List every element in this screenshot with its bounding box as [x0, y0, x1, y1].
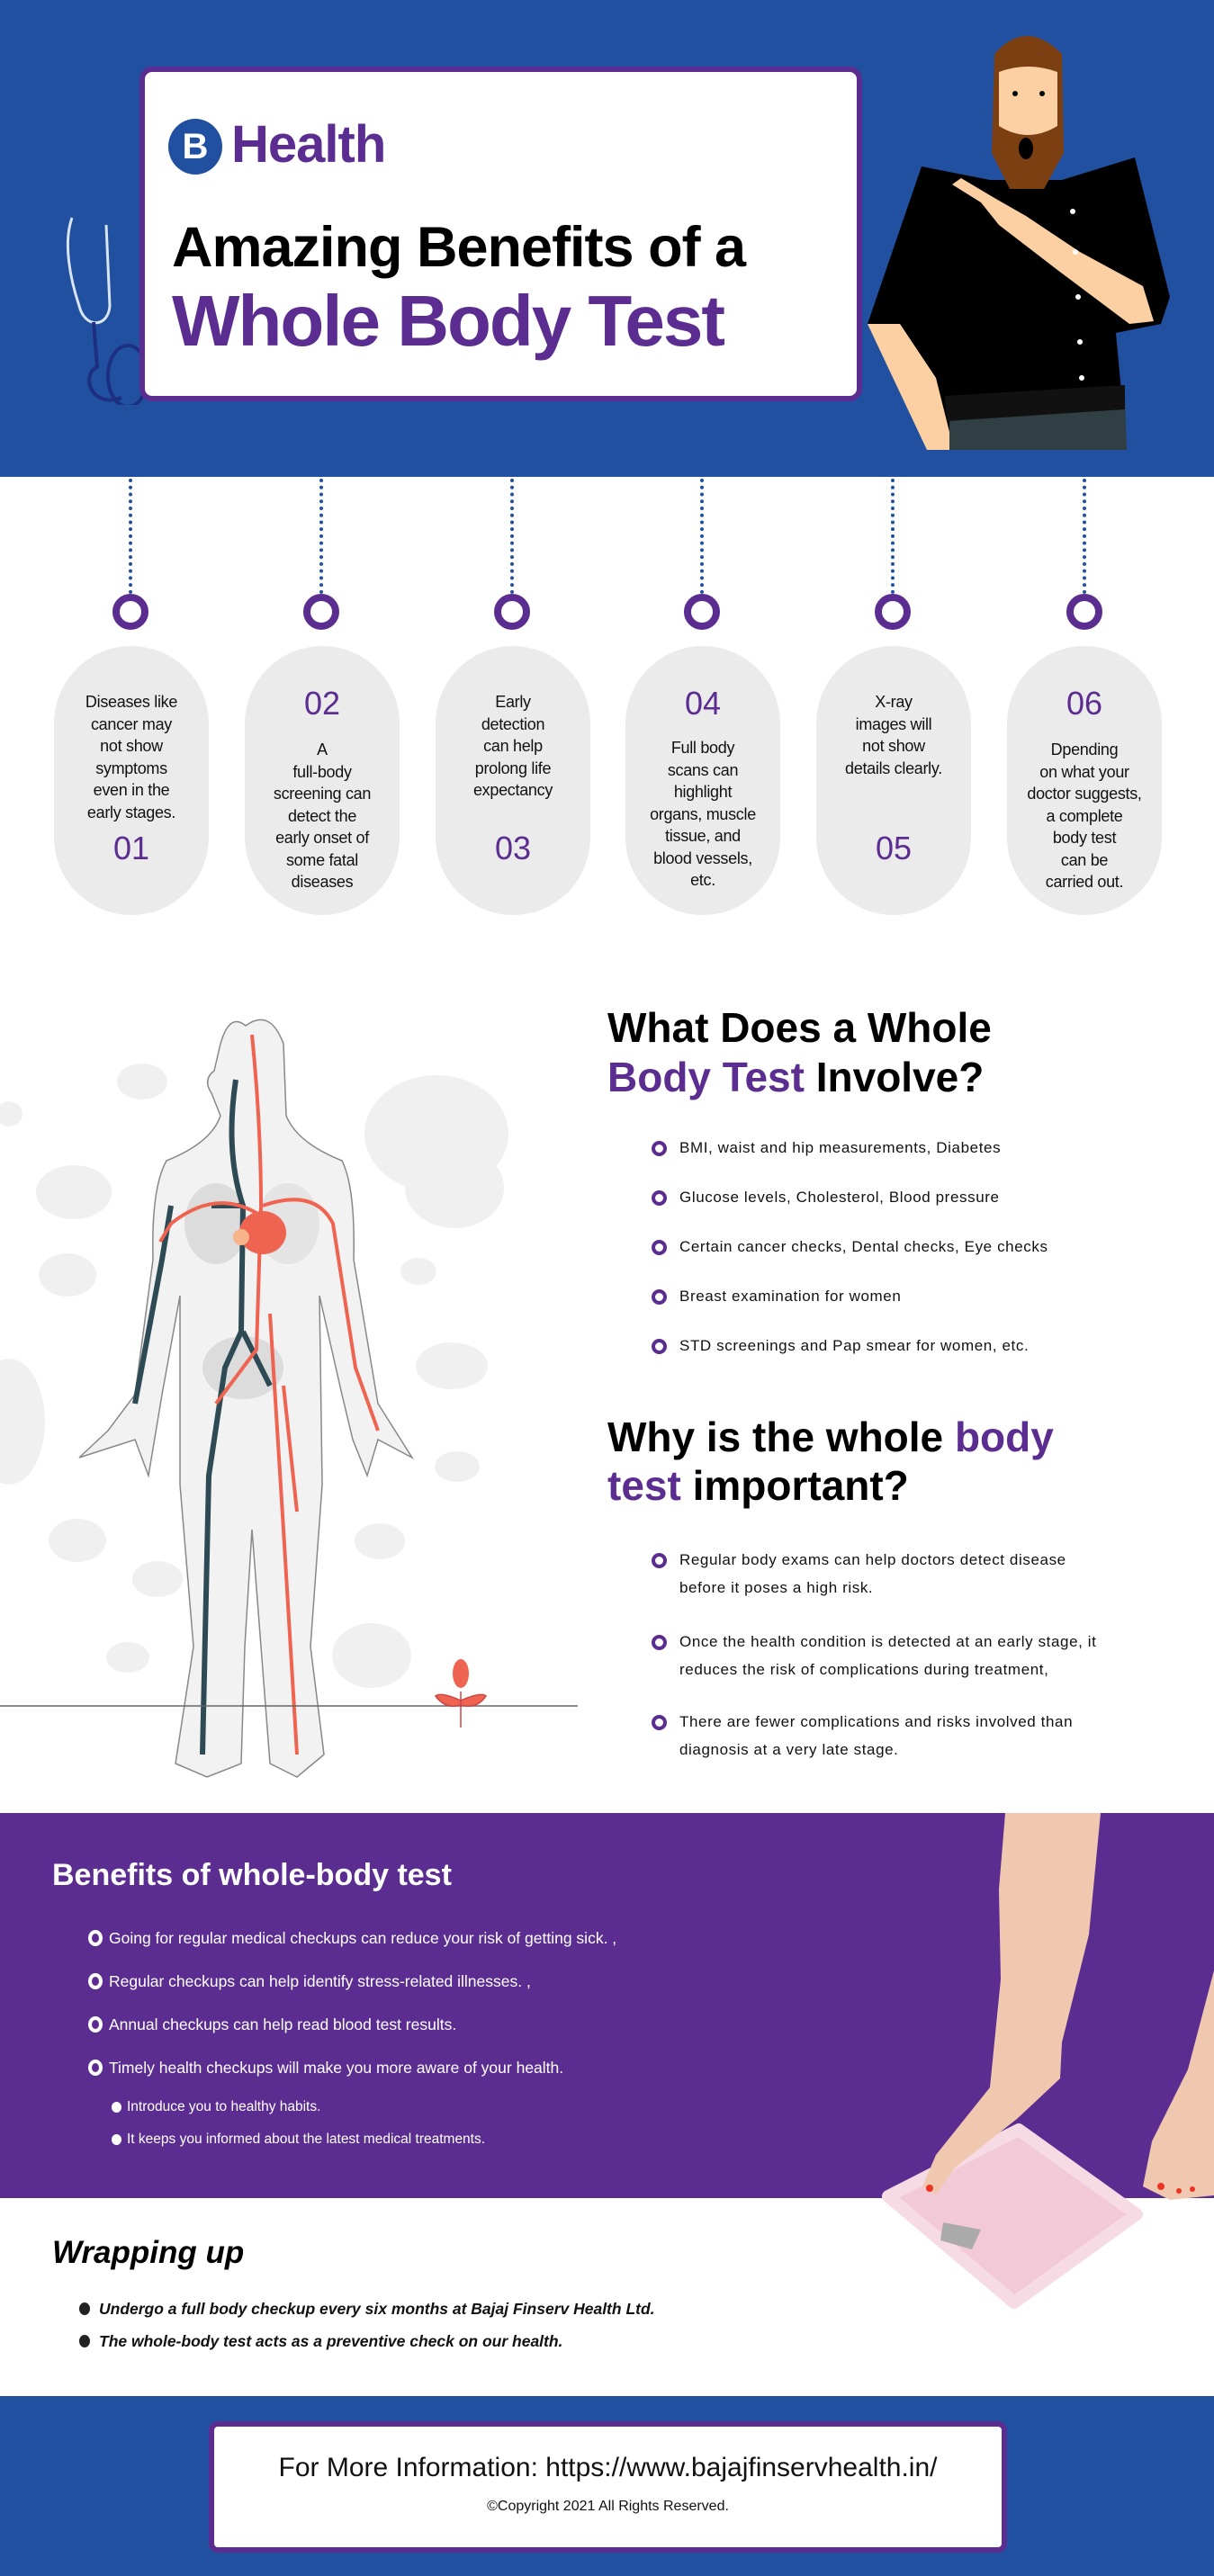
pill 05: details clearly. [845, 759, 942, 777]
list: why important: reduces the risk of complications during treatment, [679, 1661, 1048, 1678]
pill 01: early stages. [87, 803, 175, 821]
pill 06: on what your [1039, 763, 1129, 781]
pill 05 [816, 646, 971, 915]
illustration: human circulatory system [0, 1019, 578, 1778]
list: why important: Regular body exams can help doctors detect disease [679, 1551, 1066, 1568]
pill 03: Early [495, 693, 531, 711]
logo: B Health [168, 115, 385, 175]
footer: blue band [0, 2396, 1214, 2576]
list: what the test involves: Breast examination for women [679, 1288, 901, 1305]
pill 06: a complete [1046, 806, 1123, 824]
panel: benefits of whole-body test (purple) [0, 1813, 1214, 2198]
pill 03: prolong life [475, 759, 551, 777]
pill 03: can help [483, 737, 543, 755]
pill 04: 04 [685, 685, 721, 722]
pill 04: scans can [668, 761, 738, 779]
bullet list: It keeps you informed about the latest medical treatments. [127, 2132, 485, 2147]
pill 04: tissue, and [665, 827, 741, 845]
pill 04: blood vessels, [653, 849, 752, 867]
pill 02: 02 [304, 685, 340, 722]
list: why important [652, 1551, 1097, 1758]
pill 06: Dpending [1051, 740, 1118, 758]
bullet list: Timely health checkups will make you more aware of your health. [109, 2059, 563, 2077]
bullet list: Annual checkups can help read blood test results. [109, 2015, 456, 2033]
heading: What Does a Whole Body Test Involve? [607, 1004, 992, 1100]
list: why important: There are fewer complications and risks involved than [679, 1713, 1073, 1730]
pill 04: highlight [674, 783, 732, 801]
pill 02: A [317, 740, 328, 758]
list: what the test involves: Certain cancer checks, Dental checks, Eye checks [679, 1238, 1048, 1255]
heading: Why is the whole body test important?: test important? [607, 1462, 909, 1509]
bullet list: Going for regular medical checkups can reduce your risk of getting sick. , [109, 1929, 616, 1947]
list: wrapping up points: Undergo a full body checkup every six months at Bajaj Finserv Health Ltd. [99, 2300, 655, 2318]
title text: Whole Body Test [172, 281, 724, 361]
title text [172, 216, 747, 361]
heading: Benefits of whole-body test [52, 1858, 452, 1892]
list: wrapping up points [79, 2300, 655, 2350]
logo: B Health: Health [231, 115, 385, 174]
pill 06: doctor suggests, [1027, 785, 1142, 803]
list: what the test involves: BMI, waist and hip measurements, Diabetes [679, 1139, 1001, 1156]
pill 06: 06 [1066, 685, 1102, 722]
list: wrapping up points: The whole-body test acts as a preventive check on our health. [99, 2332, 562, 2350]
pill 03: detection [481, 714, 544, 732]
list: what the test involves [652, 1139, 1048, 1354]
header: blue banner [0, 0, 1214, 477]
pill 02: some fatal [286, 851, 358, 869]
pill 05: images will [856, 714, 931, 732]
pill 05: not show [862, 737, 925, 755]
panel: six benefits pills [129, 479, 1086, 594]
list: what the test involves: STD screenings and Pap smear for women, etc. [679, 1337, 1029, 1354]
title text: Amazing Benefits of a [172, 216, 745, 279]
heading: Wrapping up: Wrapping up [52, 2235, 244, 2270]
list: why important: diagnosis at a very late stage. [679, 1741, 899, 1758]
pill 01: cancer may [91, 714, 172, 732]
pill 01: 01 [113, 830, 149, 866]
illustration: feet on pink scale [882, 1813, 1214, 2309]
pill 04: Full body [671, 739, 734, 757]
pill 04 [625, 646, 780, 915]
list: why important: before it poses a high risk. [679, 1579, 873, 1596]
title card [139, 67, 862, 401]
footer card [209, 2421, 1007, 2553]
illustration: man pointing [868, 36, 1170, 450]
pill 01: Diseases like [85, 693, 177, 711]
pill 03 [436, 646, 590, 915]
pill 01: symptoms [95, 759, 167, 777]
bullet list: Introduce you to healthy habits. [127, 2099, 320, 2114]
icon: stethoscope [67, 218, 144, 405]
footer card: For More Information: https://www.bajajfinservhealth.in/ [279, 2453, 937, 2482]
list: why important: Once the health condition is detected at an early stage, it [679, 1633, 1097, 1650]
pill 04: etc. [690, 871, 715, 889]
list: what the test involves: Glucose levels, Cholesterol, Blood pressure [679, 1189, 1000, 1206]
pill 02: full-body [292, 763, 352, 781]
pill 03: 03 [495, 830, 531, 866]
footer card: ©Copyright 2021 All Rights Reserved. [487, 2499, 729, 2514]
pill 01: not show [100, 737, 163, 755]
pill 01: even in the [94, 781, 169, 799]
bullet list: Regular checkups can help identify stress-related illnesses. , [109, 1972, 531, 1990]
pill 02: screening can [274, 785, 371, 803]
pill 06 [1007, 646, 1162, 915]
pill 02: early onset of [275, 829, 369, 847]
heading: What Does a Whole Body Test Involve?: Body Test Involve? [607, 1054, 984, 1100]
pill 06: body test [1053, 829, 1116, 847]
heading: Why is the whole body test important?: Why is the whole body [607, 1414, 1054, 1460]
pill 05: 05 [876, 830, 912, 866]
heading: What Does a Whole Body Test Involve?: What Does a Whole [607, 1004, 992, 1051]
pill 04: organs, muscle [650, 804, 756, 822]
pill 03: expectancy [473, 781, 553, 799]
logo: B Health: B [183, 127, 208, 166]
pill 02: detect the [288, 806, 356, 824]
bullet list [88, 1929, 616, 2147]
pill 02 [245, 646, 400, 915]
heading: Why is the whole body test important? [607, 1414, 1054, 1509]
pill 06: carried out. [1046, 873, 1123, 891]
pill 02: diseases [292, 873, 353, 891]
pill 01 [54, 646, 209, 915]
pill 05: X-ray [875, 693, 913, 711]
pill 06: can be [1061, 851, 1108, 869]
